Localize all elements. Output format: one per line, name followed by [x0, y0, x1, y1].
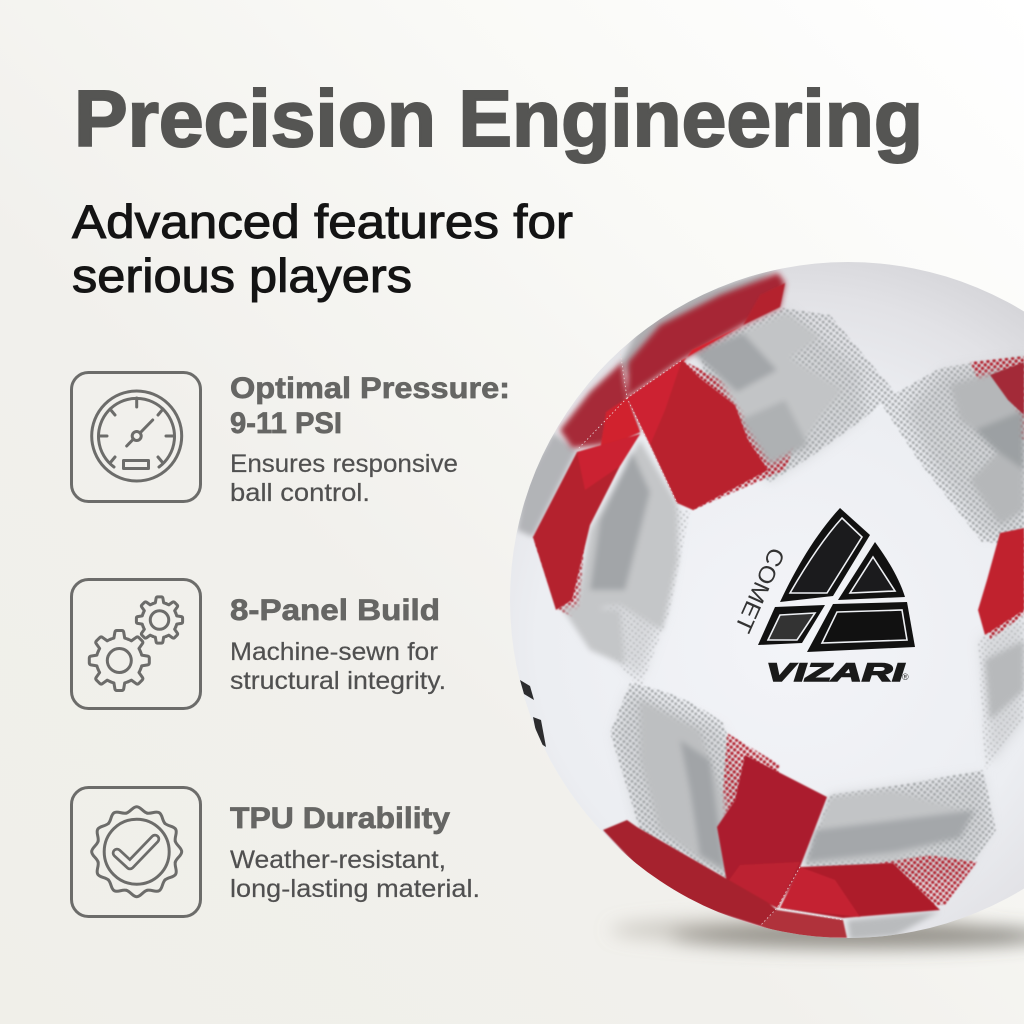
ball logo: ®: [902, 672, 909, 682]
red panels: blurred upper area: [560, 273, 785, 448]
description: 8-panel build: Machine-sewn for: [230, 638, 438, 666]
feature: tpu durability: [72, 788, 480, 916]
description: 8-panel build: structural integrity.: [230, 667, 446, 695]
ball shadow: [610, 916, 1024, 948]
subtitle: [72, 195, 573, 302]
description: optimal pressure: [230, 450, 458, 507]
heading: optimal pressure: 9-11 PSI: [230, 407, 342, 440]
description: optimal pressure: ball control.: [230, 479, 370, 507]
feature: optimal pressure: [72, 372, 510, 507]
title: Precision Engineering: [74, 74, 923, 163]
gray panels: [517, 268, 1024, 940]
icon: gears: [72, 580, 200, 708]
halftone dots: [533, 308, 1024, 905]
model name: COMET: [730, 544, 790, 637]
feature: 8-panel build: [72, 580, 446, 708]
heading: optimal pressure: Optimal Pressure:: [230, 372, 510, 405]
wordmark: VIZARI: [766, 659, 906, 687]
icon: quality badge: [72, 788, 200, 916]
description: tpu durability: Weather-resistant,: [230, 846, 446, 874]
description: tpu durability: [230, 846, 480, 903]
seams: [577, 350, 843, 926]
description: tpu durability: long-lasting material.: [230, 875, 480, 903]
subtitle: serious players: [72, 249, 412, 302]
soft gray tint under halftone: [600, 308, 1024, 880]
heading: optimal pressure: [230, 372, 510, 440]
description: optimal pressure: Ensures responsive: [230, 450, 458, 478]
subtitle: Advanced features for: [72, 195, 573, 248]
ball side print marks: [520, 680, 546, 747]
soccer ball: [510, 262, 1024, 940]
heading: 8-panel build: 8-Panel Build: [230, 594, 440, 627]
ball logo: [730, 508, 915, 687]
red panels: [533, 283, 1024, 938]
icon: pressure gauge: [72, 372, 200, 502]
description: 8-panel build: [230, 638, 446, 695]
heading: tpu durability: TPU Durability: [230, 802, 450, 835]
